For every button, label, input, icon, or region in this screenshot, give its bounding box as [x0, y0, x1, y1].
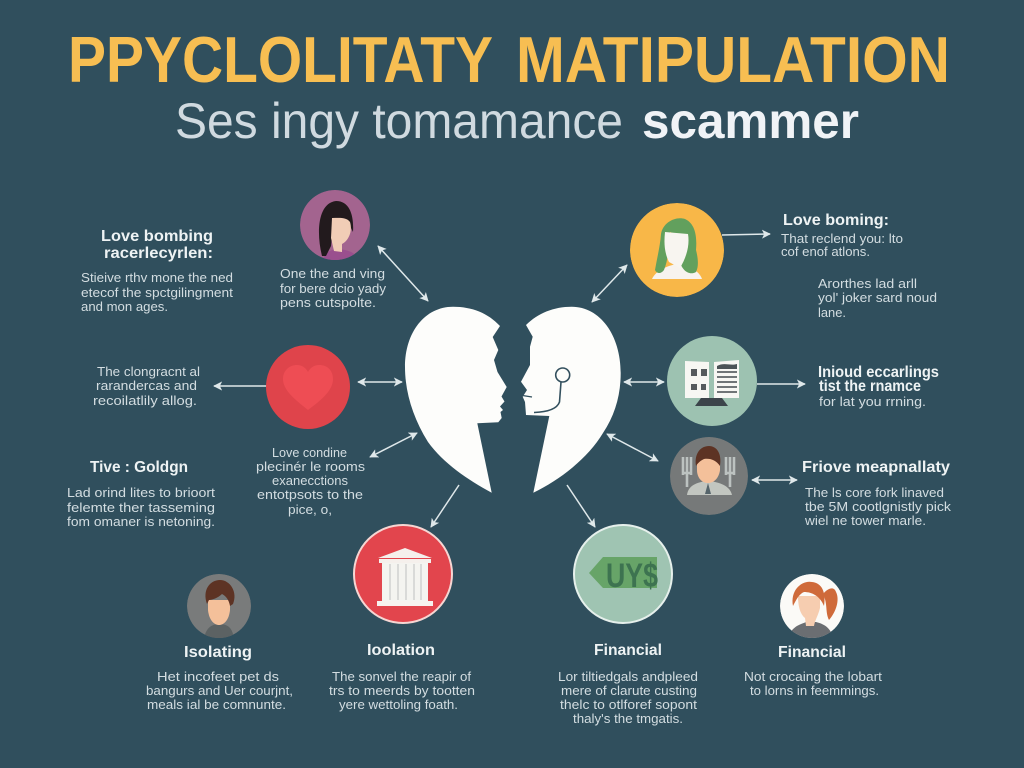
central split heart with two faces: [405, 307, 621, 493]
text: love condine: pice, o,: [288, 503, 332, 517]
text: financial, center right: Financial: [594, 642, 662, 659]
icon: red circle with heart: [266, 345, 350, 429]
text: financial, far right: [744, 644, 883, 698]
text: financial, far right: Financial: [778, 644, 846, 661]
text: ioolation: [329, 642, 475, 712]
arrow: book to heart: [624, 381, 664, 383]
text: love boming, upper right: That reclend you: lto: [781, 232, 903, 246]
text: under purple circle: for bere dcio yady: [280, 282, 387, 296]
arrow: yellow circle to text: [722, 234, 770, 235]
text: love bombing, upper left: Love bombing: [101, 228, 213, 245]
icon: green circle with money tag: UY$: [606, 557, 658, 595]
text: tive goldgn: fom omaner is netoning.: [67, 515, 215, 529]
text: financial, center right: Lor tiltiedgals andpleed: [558, 670, 698, 684]
text: financial, far right: to lorns in feemmings.: [750, 684, 879, 698]
subtitle: scammer: [642, 93, 859, 149]
text: tive goldgn: [67, 459, 216, 529]
text: left of red heart circle: rarandercas and: [96, 379, 197, 393]
text: tive goldgn: Lad orind lites to brioort: [67, 486, 216, 500]
text: financial, center right: thaly's the tmgatis.: [573, 712, 683, 726]
text: financial, center right: mere of clarute custing: [561, 684, 697, 698]
icon: teal circle with open book: [667, 336, 757, 426]
arrow: purple circle to heart: [378, 246, 428, 301]
arrows: [214, 234, 805, 527]
text: love boming, upper right: Love boming:: [783, 212, 889, 229]
text: love condine: Love condine: [272, 446, 347, 460]
subtitle: [175, 93, 859, 149]
arrow: gray circle to text: [752, 479, 797, 481]
text: isolating: Isolating: [184, 644, 252, 661]
text: love condine: plecinér le rooms: [256, 460, 365, 474]
text: under purple circle: One the and ving: [280, 267, 385, 281]
text: isolating: [146, 644, 293, 712]
icon: gray circle person isolating: [187, 574, 251, 640]
text: love bombing, upper left: etecof the spctgilingment: [81, 286, 234, 300]
text: isolating: bangurs and Uer courjnt,: [146, 684, 293, 698]
text: love condine: [256, 446, 365, 517]
icon: green circle with money tag: [574, 525, 672, 623]
text: ioolation: The sonvel the reapir of: [332, 670, 472, 684]
text: under purple circle: [280, 267, 387, 310]
text: love bombing, upper left: racerlecyrlen:: [104, 245, 213, 262]
title: PPYCLOLITATY: [68, 23, 493, 96]
text: tive goldgn: Tive : Goldgn: [90, 459, 188, 476]
text: arorthes: lane.: [818, 306, 846, 320]
text: isolating: Het incofeet pet ds: [157, 670, 279, 684]
icon: purple woman portrait: [300, 190, 370, 262]
text: love boming, upper right: [781, 212, 903, 259]
text: left of red heart circle: [93, 365, 200, 408]
title: [68, 23, 950, 96]
icon: white circle woman with orange ponytail: [780, 574, 844, 640]
text: isolating: meals ial be comnunte.: [147, 698, 286, 712]
text: love bombing, upper left: [81, 228, 234, 314]
arrow: red heart circle to heart: [358, 381, 402, 383]
text: love boming, upper right: cof enof atlons.: [781, 245, 870, 259]
text: arorthes: yol' joker sard noud: [818, 291, 937, 305]
text: friove meapnallaty: tbe 5M cootlgnistly pick: [805, 500, 952, 514]
text: inioud eccarlings: for lat you rrning.: [819, 395, 926, 409]
icon: gray circle man with forks: [670, 437, 748, 515]
text: love bombing, upper left: Stieive rthv mone the ned: [81, 271, 233, 285]
text: under purple circle: pens cutspolte.: [280, 296, 376, 310]
text: left of red heart circle: recoilatlily allog.: [93, 394, 197, 408]
text: love bombing, upper left: and mon ages.: [81, 300, 168, 314]
text: ioolation: trs to meerds by tootten: [329, 684, 475, 698]
subtitle: Ses ingy tomamance: [175, 93, 623, 149]
icon: red circle with temple: [354, 525, 452, 623]
text: financial, center right: [558, 642, 698, 726]
left heart half: [405, 307, 507, 493]
arrow: heart to money: [567, 485, 595, 527]
text: arorthes: [818, 277, 937, 320]
text: inioud eccarlings: [818, 364, 939, 409]
text: tive goldgn: felemte ther tasseming: [67, 501, 215, 515]
text: friove meapnallaty: The ls core fork linaved: [805, 486, 944, 500]
text: financial, center right: thelc to otlforef sopont: [560, 698, 698, 712]
ear and jaw line: [522, 368, 570, 412]
arrow: heart to temple: [431, 485, 459, 527]
text: arorthes: Arorthes lad arll: [818, 277, 917, 291]
text: love condine: entotpsots to the: [257, 488, 363, 502]
arrow: heart to lower left text: [370, 433, 417, 457]
text: friove meapnallaty: wiel ne tower marle.: [804, 514, 926, 528]
title: MATIPULATION: [516, 23, 950, 96]
text: financial, far right: Not crocaing the lobart: [744, 670, 883, 684]
text: ioolation: Ioolation: [367, 642, 435, 659]
arrow: red heart circle to text: [214, 385, 267, 387]
text: inioud eccarlings: tist the rnamce: [819, 378, 921, 395]
arrow: heart to gray circle: [607, 434, 658, 461]
arrow: book to text: [757, 383, 805, 385]
arrow: yellow circle to heart: [592, 265, 627, 302]
icon: yellow circle woman with green hair: [630, 203, 724, 297]
right heart half: [521, 307, 621, 493]
text: ioolation: yere wettoling foath.: [339, 698, 458, 712]
text: left of red heart circle: The clongracnt al: [97, 365, 200, 379]
text: friove meapnallaty: Friove meapnallaty: [802, 459, 950, 476]
text: inioud eccarlings: Inioud eccarlings: [818, 364, 939, 381]
text: love condine: exanecctions: [272, 474, 348, 488]
text: friove meapnallaty: [802, 459, 952, 528]
